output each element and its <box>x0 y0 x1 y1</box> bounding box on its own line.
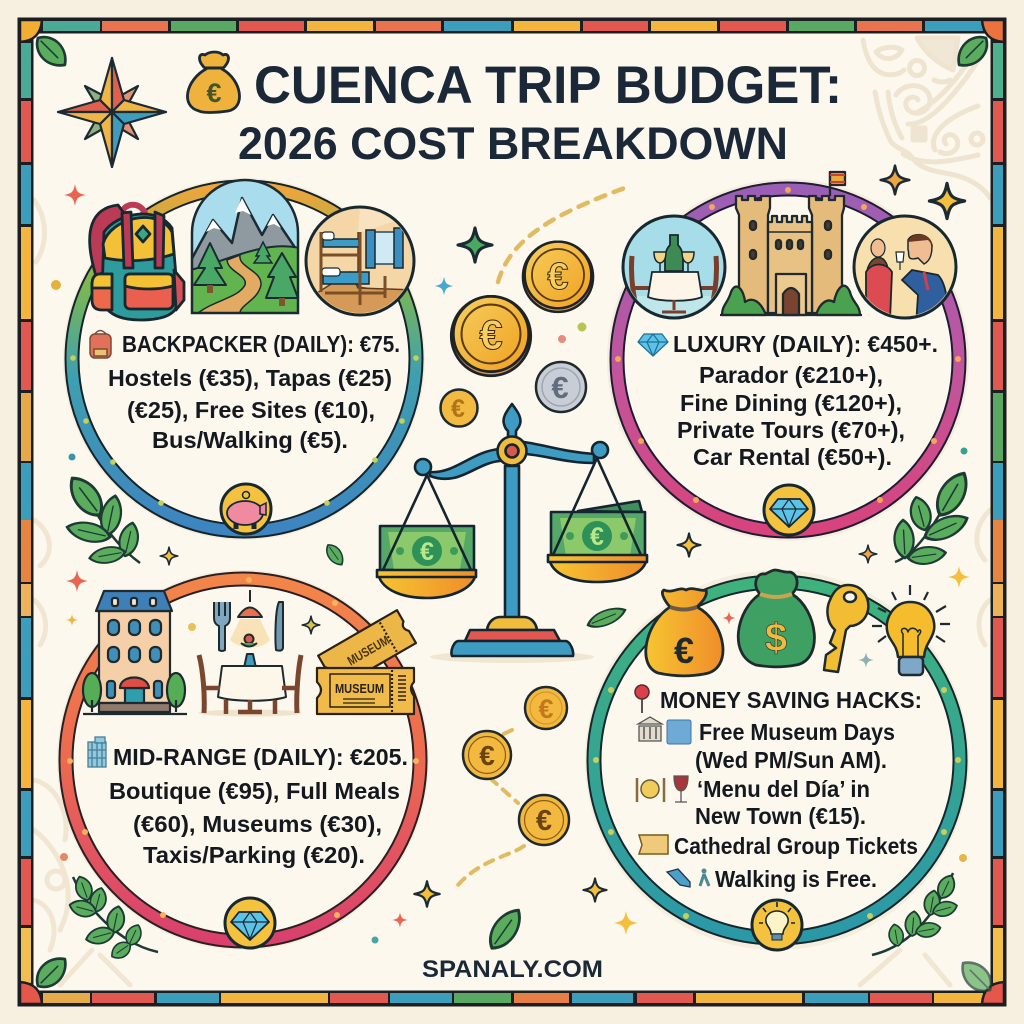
icon: coin cluster top <box>440 242 593 426</box>
text: luxury: Fine Dining (€120+), <box>680 390 902 416</box>
icon: backpack <box>90 205 184 320</box>
icon: golden key <box>824 585 868 672</box>
icon: parador castle <box>720 171 862 315</box>
decorative mandala: bottom left and sides <box>34 200 990 985</box>
left bill and pan: € <box>420 538 434 566</box>
icon: lower coins with dashed trail: € <box>479 740 495 771</box>
icon: sparkles and dots <box>51 166 970 943</box>
text: backpacker: Bus/Walking (€5). <box>152 427 348 453</box>
text: hacks: (Wed PM/Sun AM). <box>695 747 887 773</box>
icon: piggy bank badge <box>221 484 271 534</box>
icon: single leaves <box>323 541 628 954</box>
icon: mountain trail arch <box>190 178 300 314</box>
icon: coin cluster top: € <box>451 395 465 423</box>
title <box>238 56 842 169</box>
icon: diamond badge <box>764 485 814 535</box>
text: backpacker: (€25), Free Sites (€10), <box>127 397 375 423</box>
text: luxury: Car Rental (€50+). <box>693 444 892 470</box>
text: luxury <box>638 331 938 470</box>
panel: luxury <box>607 171 969 541</box>
text: mid-range: Boutique (€95), Full Meals <box>109 778 400 804</box>
icon: diamond badge mid <box>225 898 275 948</box>
text: mid-range: (€60), Museums (€30), <box>133 811 382 837</box>
text: hacks <box>635 685 922 892</box>
text: luxury: Parador (€210+), <box>699 362 883 388</box>
text: hacks: ‘Menu del Día’ in <box>697 776 870 802</box>
icon: couple circle <box>854 216 956 325</box>
decorative mandala: top right <box>863 38 990 198</box>
icon: lightbulb badge <box>752 900 802 950</box>
icon: mini backpack <box>90 330 111 358</box>
icon: mini diamond <box>638 334 668 356</box>
icon: leaf branch left <box>63 471 141 566</box>
text: mid-range <box>88 737 408 868</box>
icon: leaf branch right <box>893 468 974 566</box>
icon: shoe and walker <box>667 868 709 887</box>
icon: boutique hotel <box>83 591 187 714</box>
right bill and pan <box>548 458 647 582</box>
panel: mid-range <box>57 570 429 950</box>
icon: museum and calendar <box>638 717 691 744</box>
icon: lower coins with dashed trail: € <box>536 805 552 837</box>
icon: dollar money bag: $ <box>765 616 787 660</box>
icon: title money bag <box>187 52 239 112</box>
icon: coin cluster top: € <box>551 370 569 405</box>
icon: balance scale <box>377 404 647 663</box>
ring: mid-range <box>57 570 429 950</box>
icon: leaf branch bottom right <box>872 872 959 955</box>
icon: compass star <box>58 58 166 167</box>
title: 2026 COST BREAKDOWN <box>238 118 788 169</box>
icon: museum tickets <box>317 610 416 714</box>
icon: lower coins with dashed trail <box>458 687 569 885</box>
icon: coin cluster top: € <box>479 311 503 358</box>
panel: backpacker <box>63 178 425 540</box>
text: mid-range: MID-RANGE (DAILY): €205. <box>113 744 408 770</box>
ring: luxury <box>607 179 969 541</box>
icon: euro money bag <box>646 589 723 676</box>
icon: hostel bunk bed <box>306 207 415 320</box>
panel: money saving hacks <box>585 570 969 950</box>
icon: restaurant table <box>198 590 302 716</box>
icon: lightbulb <box>872 585 950 675</box>
text: hacks: New Town (€15). <box>695 803 866 829</box>
icon: coin cluster top: € <box>547 256 569 298</box>
icon: museum tickets: MUSEUM <box>345 632 392 668</box>
right bill and pan: € <box>590 523 604 551</box>
ring: hacks <box>585 570 969 950</box>
icon: title money bag: € <box>206 78 222 108</box>
title: CUENCA TRIP BUDGET: <box>254 56 842 115</box>
text: backpacker <box>90 330 400 453</box>
text: mid-range: Taxis/Parking (€20). <box>143 842 365 868</box>
icon: red pin <box>635 685 649 713</box>
text: backpacker: BACKPACKER (DAILY): €75. <box>122 331 400 357</box>
text: hacks: MONEY SAVING HACKS: <box>660 687 922 713</box>
footer: website: SPANALY.COM <box>422 956 603 983</box>
text: hacks: Walking is Free. <box>715 866 877 892</box>
icon: lower coins with dashed trail: € <box>538 694 554 724</box>
icon: dollar money bag <box>738 570 814 667</box>
icon: fine dining circle <box>622 214 726 320</box>
text: backpacker: Hostels (€35), Tapas (€25) <box>108 365 392 391</box>
icon: mini ticket <box>639 835 668 854</box>
text: hacks: Free Museum Days <box>699 719 895 745</box>
icon: plate and wine <box>637 776 688 802</box>
icon: leaf branch bottom left <box>68 874 158 962</box>
icon: mini hotel <box>88 737 106 767</box>
text: luxury: Private Tours (€70+), <box>677 417 905 443</box>
ring: backpacker <box>63 178 425 540</box>
icon: euro money bag: € <box>674 630 694 671</box>
text: luxury: LUXURY (DAILY): €450+. <box>673 331 938 357</box>
icon: upper dashed coin trail <box>498 186 630 282</box>
text: hacks: Cathedral Group Tickets <box>674 833 918 859</box>
left bill and pan <box>377 475 476 598</box>
icon: museum tickets: MUSEUM <box>335 681 384 696</box>
